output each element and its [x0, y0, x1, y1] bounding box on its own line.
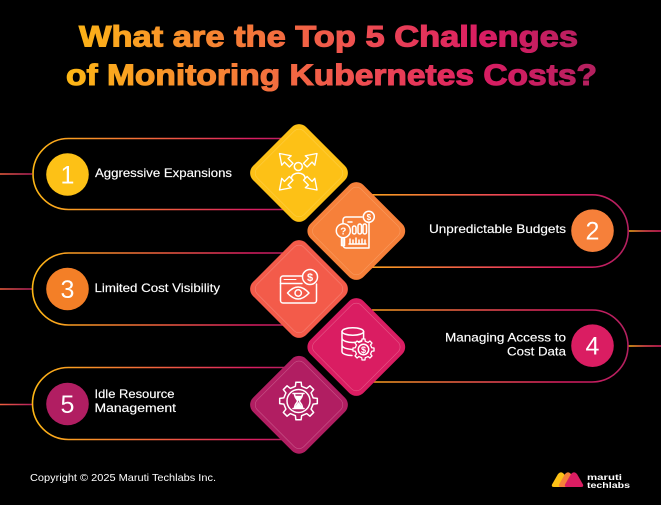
- panel: challenge 1: [0, 138, 285, 210]
- icon: report with magnifier and dollar: [336, 211, 374, 248]
- diamond 2 with budget report icon: [303, 178, 409, 284]
- icon: window with eye and dollar: $: [307, 272, 313, 284]
- number badge 5: [46, 383, 89, 425]
- icon: report with magnifier and dollar: $: [367, 213, 372, 222]
- label 1: Aggressive Expansions: [95, 166, 232, 180]
- number badge 2: 2: [586, 218, 599, 246]
- logo: maruti techlabs: [552, 472, 630, 490]
- icon: person with outward arrows: [280, 154, 317, 190]
- diamond 1 with expansion icon: [246, 120, 352, 226]
- panel: challenge 5: [0, 368, 285, 440]
- icon: database with gear: $: [361, 345, 366, 355]
- label 5: Management: [94, 401, 177, 415]
- copyright footer: Copyright © 2025 Maruti Techlabs Inc.: [30, 472, 216, 484]
- title: What are the Top 5 Challenges: [79, 20, 578, 54]
- pill outline 5: [32, 368, 285, 440]
- title: of Monitoring Kubernetes Costs?: [66, 59, 597, 92]
- logo wordmark: maruti: [587, 472, 622, 482]
- number badge 4: [571, 324, 614, 367]
- diamond 3 with cost visibility icon: [246, 236, 352, 342]
- label 4: Managing Access to: [445, 330, 566, 344]
- panel: challenge 4: [372, 310, 661, 382]
- number badge 4: 4: [586, 332, 600, 360]
- label 5: Idle Resource: [94, 387, 175, 401]
- pill outline 1: [33, 138, 285, 210]
- logo mark: [552, 472, 583, 487]
- connector line 4: [628, 345, 661, 347]
- pill outline 3: [32, 253, 285, 325]
- pill outline 4: [372, 310, 628, 382]
- label 3: Limited Cost Visibility: [94, 281, 220, 295]
- label 4: [445, 330, 566, 358]
- number badge 2: [571, 209, 614, 252]
- number badge 3: 3: [61, 276, 74, 304]
- label 2: Unpredictable Budgets: [429, 222, 566, 236]
- diamond 5 with idle gear icon: [246, 352, 352, 458]
- label 5: [94, 387, 177, 415]
- connector line 2: [628, 230, 661, 232]
- connector line 3: [0, 288, 32, 290]
- diamond 4 with data access icon: [303, 294, 409, 400]
- logo wordmark: techlabs: [587, 480, 630, 490]
- number badge 1: 1: [61, 162, 74, 190]
- connector line 5: [0, 404, 32, 406]
- panel: challenge 3: [0, 253, 285, 325]
- icon: report with magnifier and dollar: ?: [340, 226, 346, 238]
- label 4: Cost Data: [507, 344, 566, 358]
- panel: challenge 2: [372, 195, 661, 267]
- logo wordmark: [587, 472, 630, 490]
- pill outline 2: [372, 195, 628, 267]
- icon: gear with hourglass: [280, 382, 317, 420]
- number badge 3: [46, 268, 89, 310]
- number badge 1: [46, 153, 89, 196]
- connector line 1: [0, 173, 32, 175]
- number badge 5: 5: [61, 391, 74, 419]
- title: [66, 20, 597, 92]
